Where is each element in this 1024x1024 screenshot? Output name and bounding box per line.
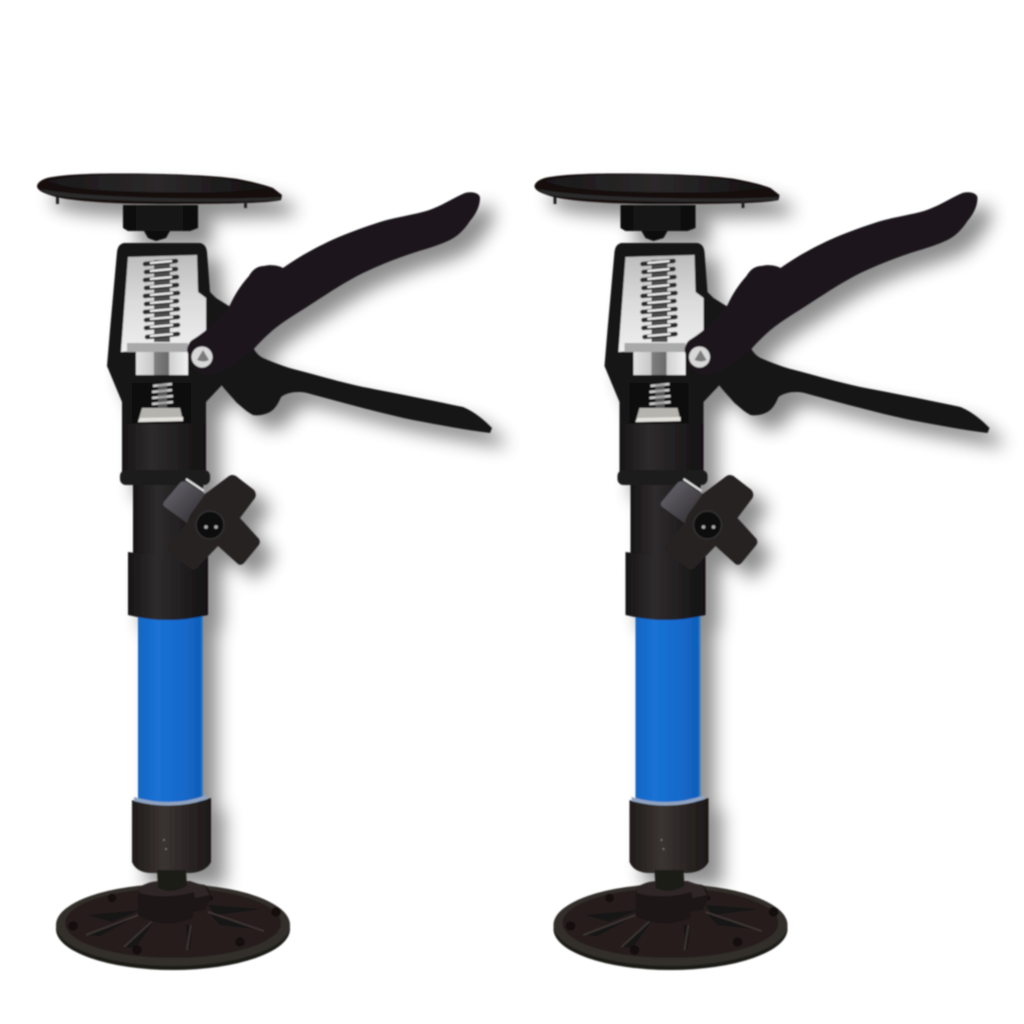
tool left xyxy=(37,173,492,970)
tool right xyxy=(534,173,990,970)
drop shadow right xyxy=(548,187,1004,886)
jack: right xyxy=(534,173,1004,970)
jack: left xyxy=(37,173,506,970)
drop shadow left xyxy=(51,187,506,886)
